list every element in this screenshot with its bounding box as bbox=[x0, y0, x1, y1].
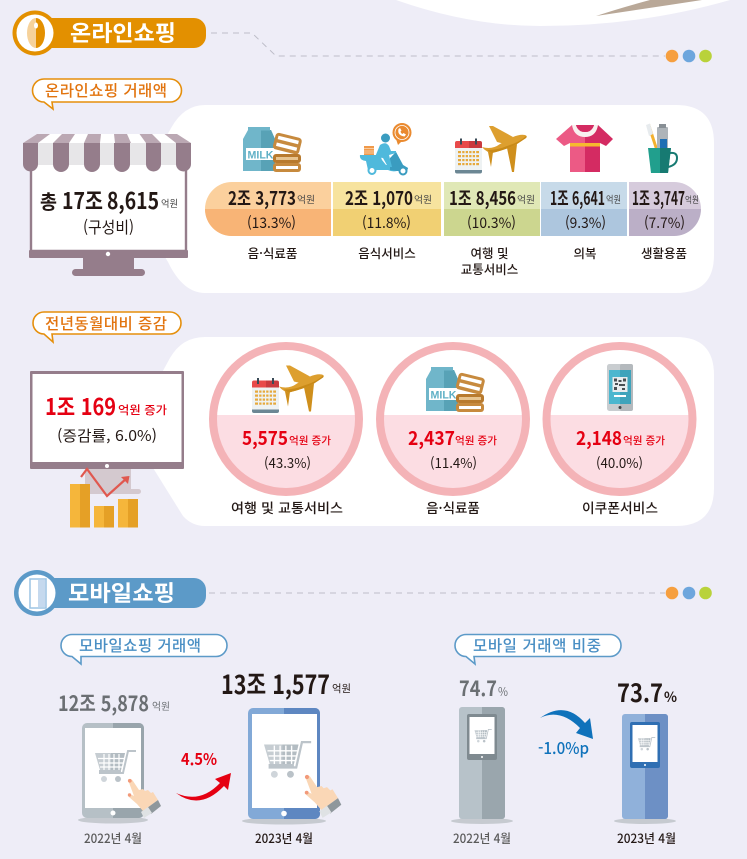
values: food service: 억원 bbox=[414, 192, 432, 206]
value 2022 mobile: 억원 bbox=[152, 698, 170, 713]
panel: online breakdown bbox=[130, 105, 714, 293]
bar: category shares bbox=[205, 182, 701, 236]
icon: milk and cookies bbox=[243, 127, 303, 172]
callout: online transaction bbox=[33, 79, 181, 109]
values: food bbox=[228, 184, 315, 262]
circle: e-coupon: (40.0%) bbox=[596, 452, 643, 472]
values: travel: (10.3%) bbox=[467, 212, 516, 233]
values: travel: 1조 8,456 bbox=[449, 184, 516, 211]
dashed connector bbox=[211, 33, 665, 56]
date labels mobile: 2022년 4월 bbox=[84, 828, 142, 847]
date labels share: 2022년 4월 bbox=[453, 828, 511, 847]
value 2022 mobile: 12조 5,878 bbox=[58, 688, 149, 718]
circle: food bbox=[380, 346, 526, 517]
values: daily goods: (7.7%) bbox=[644, 212, 685, 233]
values: daily goods: 생활용품 bbox=[641, 243, 687, 262]
date labels share bbox=[453, 828, 676, 847]
value share 2023: % bbox=[664, 687, 677, 707]
values: travel: 억원 bbox=[517, 192, 535, 206]
year on year total: 억원 증가 bbox=[118, 402, 167, 418]
values: daily goods bbox=[632, 184, 699, 262]
circle: food: (11.4%) bbox=[430, 452, 477, 472]
value share 2023: 73.7 bbox=[617, 674, 663, 710]
circle: food: 음·식료품 bbox=[426, 497, 480, 517]
values: travel bbox=[449, 184, 535, 278]
values: food: 억원 bbox=[297, 192, 315, 206]
date labels share: 2023년 4월 bbox=[617, 828, 676, 847]
section heading: mobile shopping: 모바일쇼핑 bbox=[68, 576, 175, 608]
top decoration bbox=[396, 0, 730, 26]
circle: travel: (43.3%) bbox=[264, 452, 311, 472]
icon: kiosk 2023 bbox=[614, 714, 676, 824]
panel: year on year bbox=[130, 337, 714, 526]
icon: t-shirt bbox=[556, 125, 613, 172]
values: travel: 교통서비스 bbox=[461, 259, 518, 278]
dots bbox=[666, 587, 712, 599]
value share 2022: 74.7 bbox=[459, 673, 497, 703]
arrow: down 1.0 bbox=[540, 710, 593, 739]
total amount: 총 bbox=[40, 186, 57, 215]
value share 2022: % bbox=[498, 683, 508, 700]
dashed connector bbox=[209, 592, 665, 594]
values: food: (13.3%) bbox=[247, 212, 296, 233]
values: clothing: (9.3%) bbox=[565, 212, 606, 233]
callout: year on year change: 전년동월대비 증감 bbox=[45, 312, 167, 334]
section heading: online shopping: 온라인쇼핑 bbox=[70, 16, 176, 48]
section heading: mobile shopping bbox=[14, 570, 206, 616]
circle: travel: 여행 및 교통서비스 bbox=[231, 497, 343, 517]
circle: e-coupon bbox=[546, 346, 692, 517]
circle: food: 억원 증가 bbox=[455, 433, 497, 448]
total amount: 억원 bbox=[161, 196, 178, 210]
values: daily goods: 1조 3,747 bbox=[632, 184, 685, 211]
label: 4.5%: 4.5% bbox=[181, 746, 217, 770]
total amount: 17조 bbox=[62, 182, 103, 216]
callout: mobile transaction: 모바일쇼핑 거래액 bbox=[79, 634, 201, 656]
value 2023 mobile: 억원 bbox=[332, 681, 351, 696]
values: travel: 여행 및 bbox=[470, 243, 509, 262]
year on year total bbox=[45, 388, 167, 446]
callout: mobile transaction bbox=[61, 634, 227, 664]
values: food service: 2조 1,070 bbox=[345, 184, 413, 211]
total amount bbox=[40, 182, 178, 238]
values: food: 음·식료품 bbox=[248, 243, 297, 262]
total amount: (구성비) bbox=[83, 214, 134, 238]
date labels mobile: 2023년 4월 bbox=[255, 828, 313, 847]
values: food service bbox=[345, 184, 432, 262]
icon: storefront monitor bbox=[23, 134, 191, 276]
icon: delivery scooter bbox=[360, 123, 412, 174]
values: clothing bbox=[550, 184, 621, 262]
values: food: 2조 3,773 bbox=[228, 184, 296, 211]
values: food service: (11.8%) bbox=[362, 212, 411, 233]
values: clothing: 의복 bbox=[573, 243, 597, 262]
icon: tablet 2022 bbox=[78, 723, 161, 824]
callout: mobile share: 모바일 거래액 비중 bbox=[473, 634, 601, 656]
year on year total: 1조 169 bbox=[45, 388, 116, 422]
circle: travel bbox=[213, 346, 359, 517]
value 2023 mobile: 13조 1,577 bbox=[221, 665, 330, 702]
icon: toothbrush cup bbox=[646, 124, 677, 173]
circle: travel: 억원 증가 bbox=[289, 433, 331, 448]
values: clothing: 1조 6,641 bbox=[550, 184, 605, 211]
circle: e-coupon: 억원 증가 bbox=[623, 433, 665, 448]
section heading: online shopping bbox=[12, 10, 206, 56]
year on year total: (증감률, 6.0%) bbox=[57, 425, 157, 446]
icon: monitor with coins bbox=[30, 371, 184, 528]
circle: e-coupon: 이쿠폰서비스 bbox=[582, 497, 658, 517]
arrow: up 4.5% bbox=[176, 773, 231, 801]
icon: kiosk 2022 bbox=[451, 707, 513, 824]
callout: mobile share bbox=[455, 634, 621, 664]
icon: tablet 2023 bbox=[242, 708, 341, 824]
callout: year on year change bbox=[33, 312, 181, 342]
circle: food: 2,437 bbox=[408, 424, 455, 451]
label: -1.0%p: -1.0%p bbox=[538, 735, 589, 759]
total amount: 8,615 bbox=[107, 182, 159, 216]
dots bbox=[666, 50, 712, 62]
circle: travel: 5,575 bbox=[242, 424, 288, 451]
values: food service: 음식서비스 bbox=[358, 243, 416, 262]
date labels mobile bbox=[84, 828, 313, 847]
circle: e-coupon: 2,148 bbox=[576, 424, 622, 451]
values: clothing: 억원 bbox=[606, 192, 621, 206]
icon: calendar and airplane bbox=[455, 126, 527, 174]
callout: online transaction: 온라인쇼핑 거래액 bbox=[45, 79, 167, 101]
values: daily goods: 억원 bbox=[685, 193, 699, 206]
